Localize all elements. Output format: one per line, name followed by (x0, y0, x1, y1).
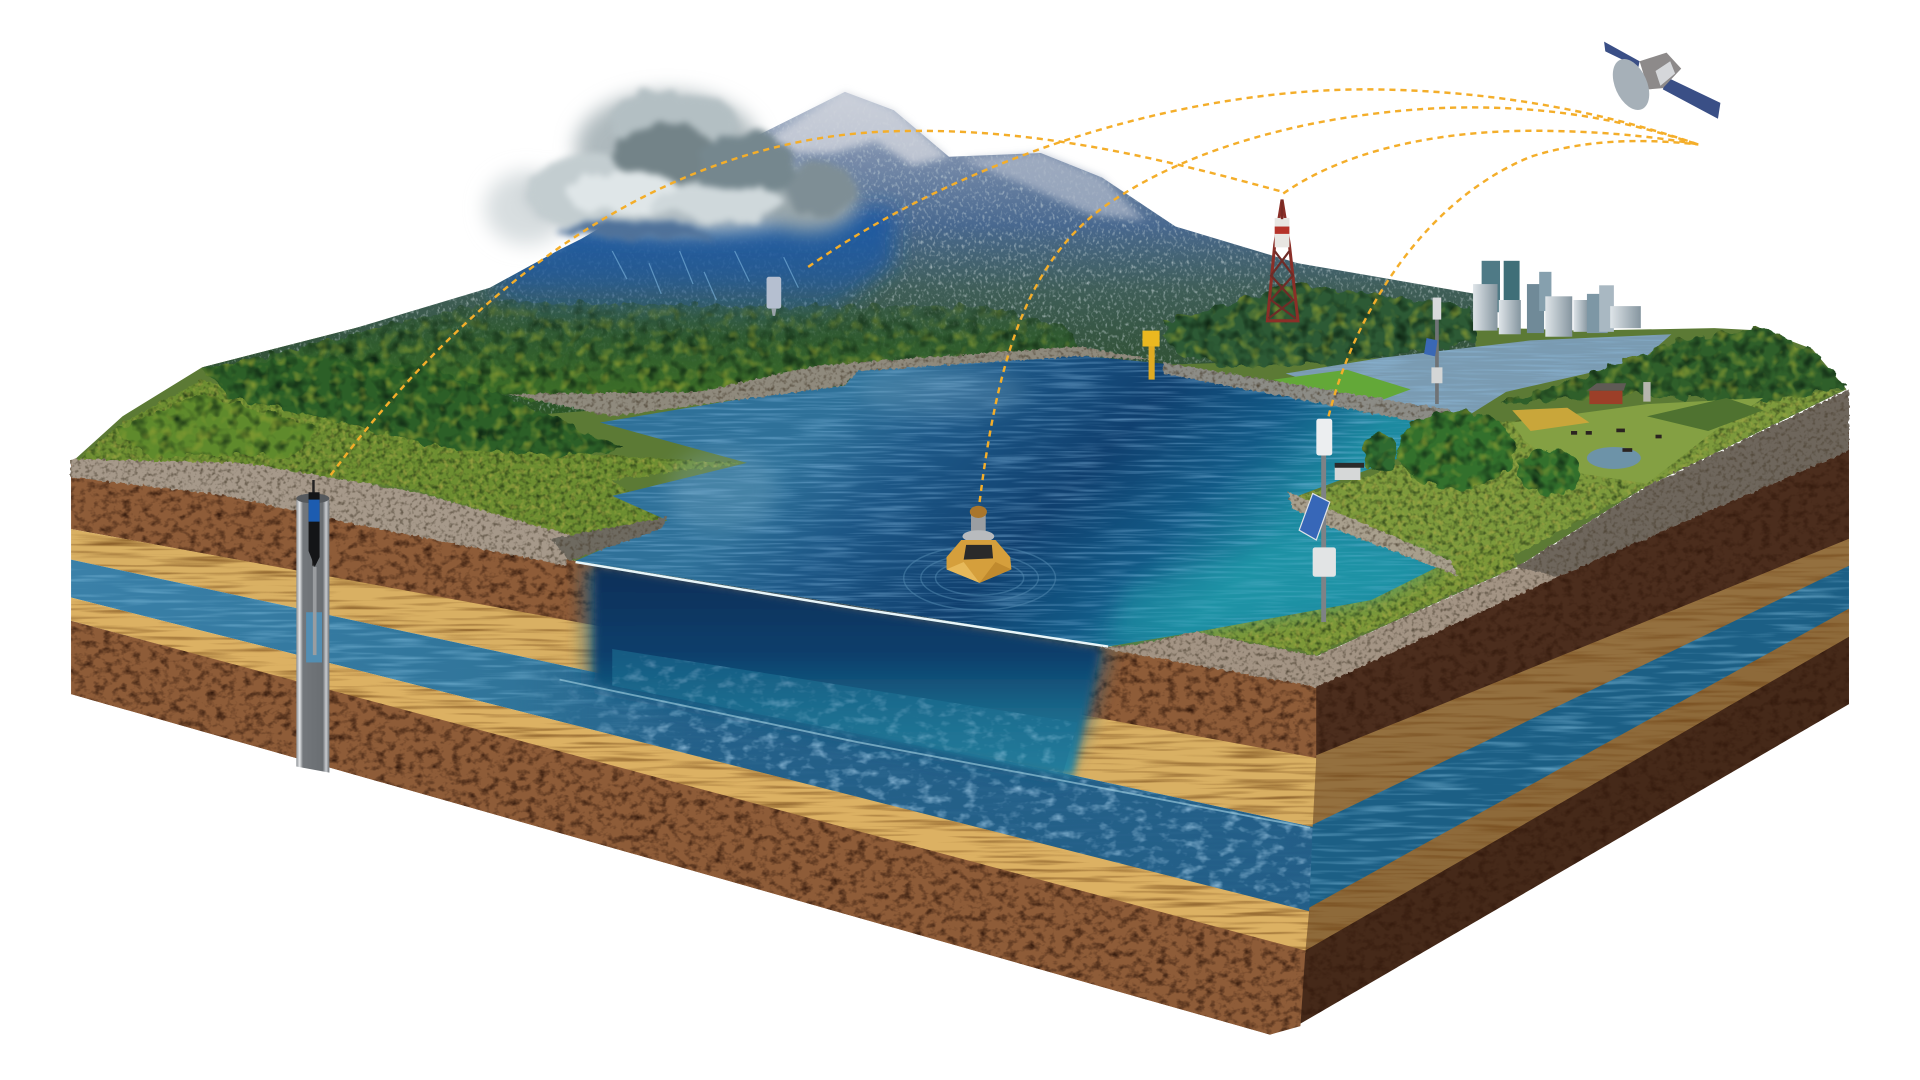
panel: right face of the ground block (1270, 429, 1849, 1035)
panel: land surface (71, 92, 1847, 656)
panel: front face of the ground block (71, 460, 1322, 1035)
data links: dashed arcs to satellite (331, 89, 1698, 502)
link: buoy to satellite (980, 107, 1698, 502)
farm pond (1587, 447, 1641, 469)
side sensor box (1335, 467, 1360, 480)
solar wing left (1604, 42, 1640, 67)
rain streaks (612, 251, 798, 300)
tree cluster right shore (1365, 411, 1581, 493)
front face: upper sand (71, 529, 1322, 829)
pebbled part of the aquifer (514, 659, 1316, 913)
link: station to satellite (1329, 141, 1698, 416)
grass front corner (1196, 539, 1517, 654)
mast cap (970, 506, 987, 518)
sonde body (309, 492, 320, 567)
water in the well (306, 612, 322, 662)
sonde cable (312, 480, 315, 566)
icon: rain gauge sensor (767, 277, 781, 316)
front face: water layer (71, 560, 1322, 915)
sonde blue band (309, 500, 320, 522)
sensor box lid (1335, 463, 1364, 468)
land base (71, 294, 1847, 656)
barn (1587, 383, 1626, 404)
satellite body (1640, 53, 1681, 89)
rear lake (1286, 334, 1671, 422)
city skyline (1473, 261, 1641, 337)
snow cap (769, 92, 949, 165)
hull facet right (980, 562, 1011, 583)
left shore rocks (551, 517, 667, 561)
icon: satellite (1604, 42, 1720, 119)
left bay haze (667, 447, 778, 533)
forest left shore trees (202, 355, 624, 456)
silo (1643, 382, 1651, 402)
ultrasonic sensor head (1316, 419, 1332, 456)
rippled lower water (612, 649, 1078, 774)
casing opening (296, 493, 329, 503)
lake cross-section (560, 563, 1310, 828)
right rock band darker (1517, 389, 1849, 577)
sunlit reflection (857, 367, 1029, 416)
probe (313, 567, 317, 655)
solar wing right (1663, 77, 1720, 119)
well casing (296, 500, 329, 773)
cows (1571, 429, 1662, 452)
icon: water level gauge (1142, 331, 1160, 380)
rocky edge: left (71, 459, 576, 566)
right face: lower sand (1302, 609, 1849, 955)
collar (962, 530, 994, 542)
icon: floating buoy (904, 506, 1056, 610)
icon: groundwater well (296, 480, 329, 773)
farmland (1512, 382, 1763, 484)
right face: lower soil (1270, 637, 1849, 1035)
icon: communications tower (1267, 200, 1298, 321)
yellow field (1512, 408, 1589, 431)
cloud billows (527, 91, 860, 241)
lake front edge foam (576, 562, 1108, 647)
link: tower to satellite (1283, 131, 1698, 193)
forest far right (1500, 328, 1844, 404)
station pole (1321, 422, 1326, 622)
grass right shore (1298, 389, 1843, 563)
hull facet left (947, 562, 980, 583)
icon: weather station (1299, 419, 1364, 622)
second snow cap (961, 153, 1145, 220)
teal shallows (1108, 539, 1445, 644)
seawall (1163, 362, 1451, 429)
right face: water layer (1305, 566, 1849, 912)
aquifer top ridge (560, 680, 1310, 828)
instrument window (964, 545, 993, 560)
forest on lower slopes (211, 301, 1080, 410)
dish antenna (1606, 53, 1657, 116)
cloud soft body (485, 92, 857, 245)
icon: rear solar station (1424, 298, 1442, 404)
rocky edge: right corner (1100, 389, 1849, 687)
shoreline beach far side (508, 347, 1157, 416)
right shore rocks (1288, 492, 1457, 576)
pasture (1512, 398, 1763, 484)
cloud (485, 91, 860, 245)
front face: lower soil (71, 621, 1322, 1035)
rain curtain on the slope (490, 208, 894, 337)
bus panel (1656, 61, 1675, 86)
ripples (904, 546, 1056, 610)
green bushes front left (116, 394, 318, 456)
mountain range (202, 92, 1476, 416)
link: rain gauge to satellite (808, 89, 1698, 267)
link: well to tower (331, 131, 1280, 475)
right face: upper soil (1313, 429, 1849, 759)
crop field (1647, 398, 1763, 431)
logger box (1313, 547, 1336, 577)
hull (947, 540, 1011, 583)
right face: upper sand (1309, 539, 1849, 829)
front face: upper soil (71, 460, 1322, 762)
lake surface (576, 355, 1451, 647)
green marsh patch (1273, 370, 1411, 402)
meadow left shore (73, 380, 743, 539)
mast (971, 514, 986, 539)
solar panel (1299, 493, 1330, 540)
front face: lower sand (71, 598, 1322, 958)
far forest right of the lake (1163, 284, 1476, 367)
